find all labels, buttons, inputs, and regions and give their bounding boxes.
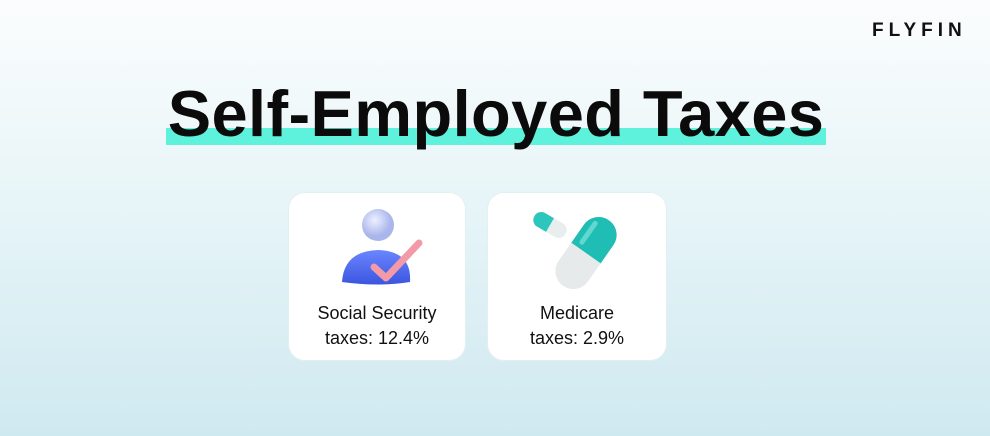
title: Self-Employed Taxes xyxy=(168,77,824,150)
logo: FLYFIN xyxy=(872,20,967,41)
label xyxy=(317,303,437,348)
label: Medicare xyxy=(540,303,614,323)
icon: person with check xyxy=(342,209,422,284)
icon: pills xyxy=(533,212,617,289)
highlight bar xyxy=(166,128,826,145)
label: taxes: 2.9% xyxy=(530,328,624,348)
label: taxes: 12.4% xyxy=(325,328,429,348)
card: social security xyxy=(289,193,465,360)
label xyxy=(530,303,624,348)
label: Social Security xyxy=(317,303,437,323)
card: medicare xyxy=(488,193,666,360)
